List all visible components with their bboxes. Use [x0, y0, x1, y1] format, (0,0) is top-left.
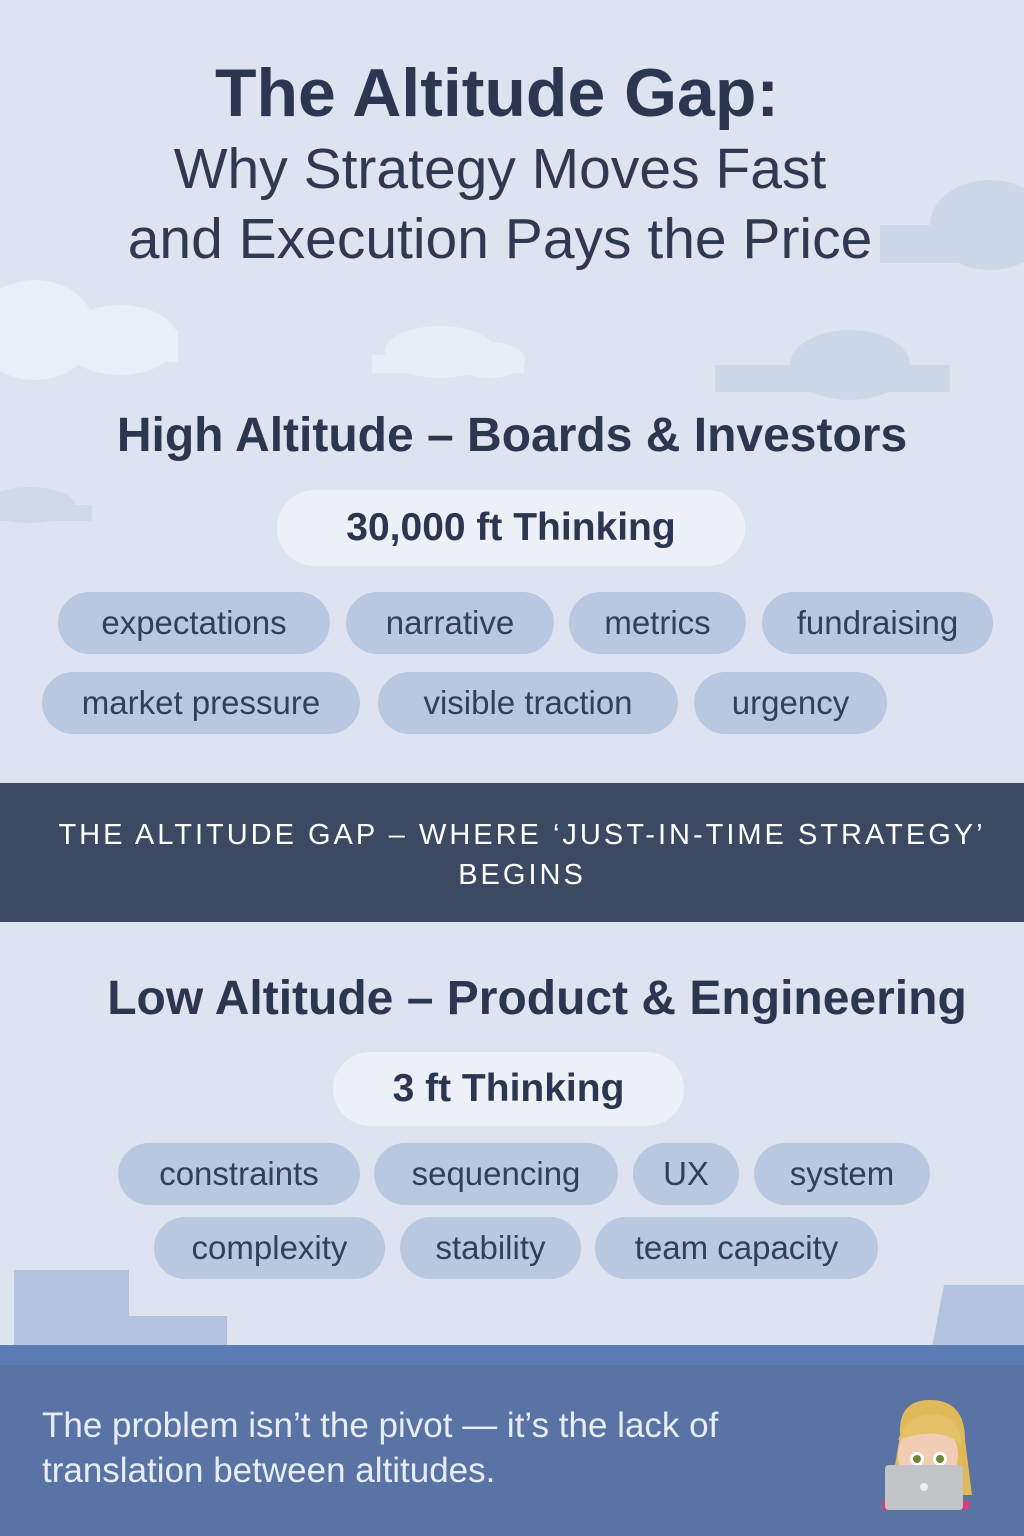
low altitude tags: UX [663, 1155, 709, 1192]
footer text: The problem isn’t the pivot — it’s the lack of [42, 1406, 718, 1445]
low altitude tags: complexity [192, 1229, 347, 1266]
footer text: translation between altitudes. [42, 1451, 495, 1490]
high altitude tags: fundraising [797, 604, 958, 641]
pill: 3 ft thinking: 3 ft Thinking [393, 1067, 624, 1110]
high altitude tags: market pressure [82, 684, 320, 721]
low altitude tags: stability [435, 1229, 546, 1266]
high altitude tags: metrics [604, 604, 711, 641]
heading: high altitude: High Altitude – Boards & Investors [117, 409, 907, 462]
high altitude tags: urgency [732, 684, 849, 721]
band: altitude gap: BEGINS [458, 859, 586, 891]
subtitle: Why Strategy Moves Fast [174, 137, 826, 201]
high altitude tags: expectations [101, 604, 287, 641]
band: altitude gap: THE ALTITUDE GAP – WHERE ‘JUST-IN-TIME STRATEGY’ [58, 819, 986, 851]
high altitude tags [42, 592, 993, 734]
high altitude tags: narrative [386, 604, 514, 641]
background clouds [0, 180, 1024, 523]
low altitude tags: team capacity [635, 1229, 838, 1266]
buildings [14, 1270, 1024, 1345]
pill: 3 ft thinking [333, 1052, 684, 1126]
pill: 30,000 ft thinking [277, 490, 745, 566]
low altitude tags [118, 1143, 930, 1279]
pill: 30,000 ft thinking: 30,000 ft Thinking [346, 506, 676, 549]
subtitle: and Execution Pays the Price [128, 207, 872, 271]
low altitude tags: sequencing [412, 1155, 580, 1192]
title: The Altitude Gap: [215, 55, 779, 131]
high altitude tags: visible traction [423, 684, 633, 721]
footer text [42, 1406, 718, 1490]
band: altitude gap [0, 783, 1024, 922]
footer panel [0, 1345, 1024, 1536]
low altitude tags: system [790, 1155, 894, 1192]
low altitude tags: constraints [159, 1155, 319, 1192]
heading: low altitude: Low Altitude – Product & Engineering [107, 972, 967, 1025]
icon: avatar with laptop [882, 1400, 972, 1510]
subtitle [128, 137, 872, 271]
